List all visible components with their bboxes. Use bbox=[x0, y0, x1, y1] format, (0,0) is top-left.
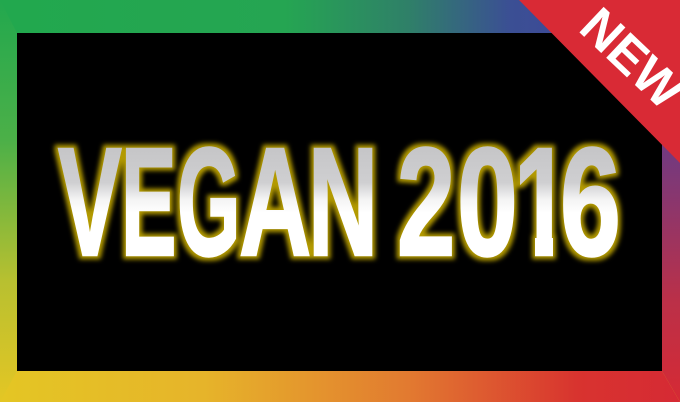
title: VEGAN 2016: A bbox=[239, 115, 311, 288]
title: VEGAN 2016: 1 bbox=[514, 115, 570, 288]
title: VEGAN 2016: 2 bbox=[397, 116, 455, 288]
corner ribbon: NEW bbox=[519, 0, 680, 163]
title: VEGAN 2016 bbox=[51, 140, 624, 264]
title: VEGAN 2016: G bbox=[177, 116, 240, 289]
title: VEGAN 2016: V bbox=[58, 117, 122, 289]
title: VEGAN 2016: 6 bbox=[560, 117, 621, 288]
title: VEGAN 2016: N bbox=[308, 116, 378, 289]
black central panel bbox=[17, 33, 662, 371]
title: VEGAN 2016: 0 bbox=[457, 117, 518, 288]
title: VEGAN 2016: E bbox=[121, 117, 176, 289]
